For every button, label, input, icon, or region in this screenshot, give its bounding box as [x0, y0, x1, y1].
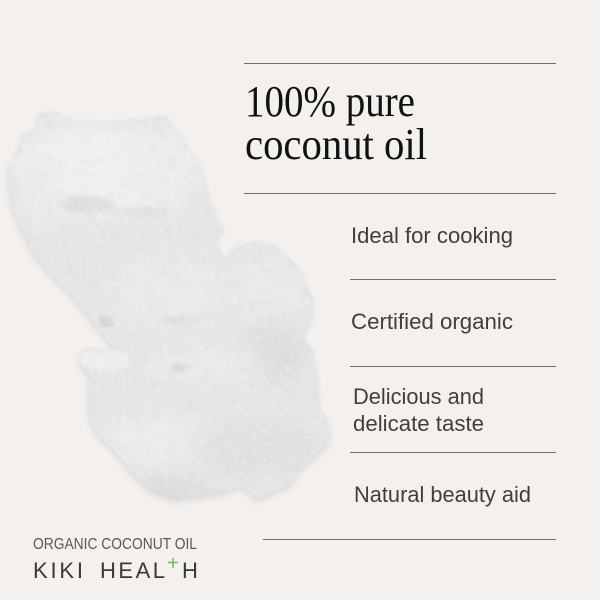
brand logo: H — [182, 558, 198, 583]
benefit: delicious and delicate taste: Delicious and — [353, 384, 484, 409]
benefit: natural beauty aid: Natural beauty aid — [354, 482, 531, 507]
brand logo: KIKI — [33, 558, 83, 583]
benefit: ideal for cooking: Ideal for cooking — [351, 223, 513, 248]
benefit: delicious and delicate taste — [353, 384, 484, 436]
divider lines — [244, 64, 556, 540]
product label: ORGANIC COCONUT OIL — [33, 536, 197, 553]
image: coconut oil swatch — [0, 100, 345, 510]
brand logo — [33, 558, 198, 583]
brand logo: HEAL — [100, 558, 165, 583]
benefit: delicious and delicate taste: delicate taste — [353, 411, 484, 436]
benefit: certified organic: Certified organic — [351, 309, 513, 334]
title — [245, 77, 427, 169]
title: coconut oil — [245, 120, 427, 169]
icon: green plus — [168, 558, 178, 568]
title: 100% pure — [245, 77, 415, 126]
